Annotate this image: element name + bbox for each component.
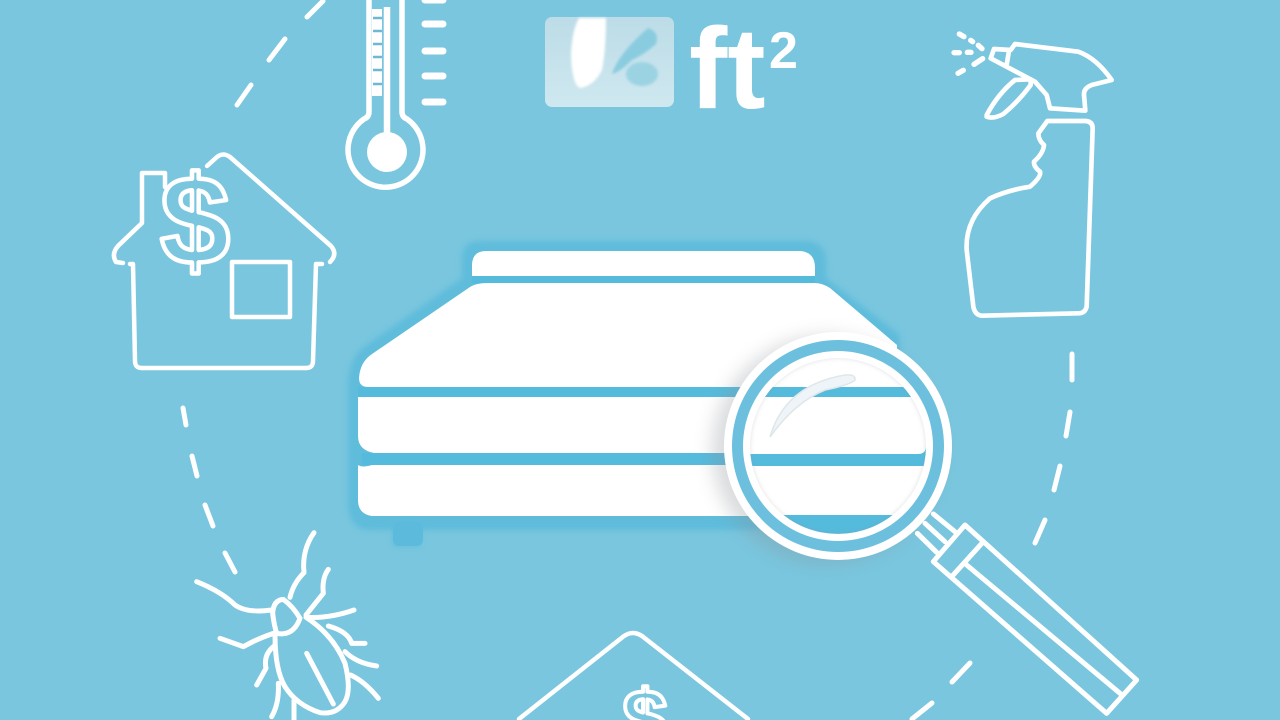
mattress halo shadow (348, 241, 900, 546)
icon: cockroach (197, 533, 378, 719)
mattress foot (393, 522, 423, 546)
mattress blue band one (358, 387, 918, 397)
trigger (987, 79, 1031, 118)
icon: house with dollar sign: $ (160, 150, 230, 291)
icon: bottom house with dollar sign (519, 633, 748, 720)
magnifying glass (712, 332, 1137, 713)
dashed circle path (183, 1, 1072, 719)
magnifier handle (917, 514, 1137, 713)
mattress blue band two (362, 453, 902, 465)
logo text ft2: ft (689, 5, 766, 133)
lens ring (724, 332, 952, 560)
logo text ft2: 2 (769, 22, 798, 80)
spray droplets (954, 34, 983, 73)
mattress bottom layer (358, 465, 900, 516)
pillow seam (472, 276, 815, 283)
lens inner shade (747, 355, 929, 537)
logo: square feet (545, 5, 798, 133)
logo card (545, 17, 674, 107)
icon: thermometer (348, 0, 443, 187)
lens glare (770, 375, 855, 437)
lens contents (750, 358, 926, 534)
spray head (991, 44, 1112, 111)
pillow top (472, 251, 815, 276)
mattress (348, 241, 918, 546)
mattress top layer (359, 283, 897, 387)
bottle body (967, 121, 1093, 316)
lens shadow (712, 336, 940, 564)
icon: house with dollar sign (114, 150, 334, 368)
mattress middle layer (358, 397, 900, 453)
icon: spray bottle (954, 34, 1112, 316)
